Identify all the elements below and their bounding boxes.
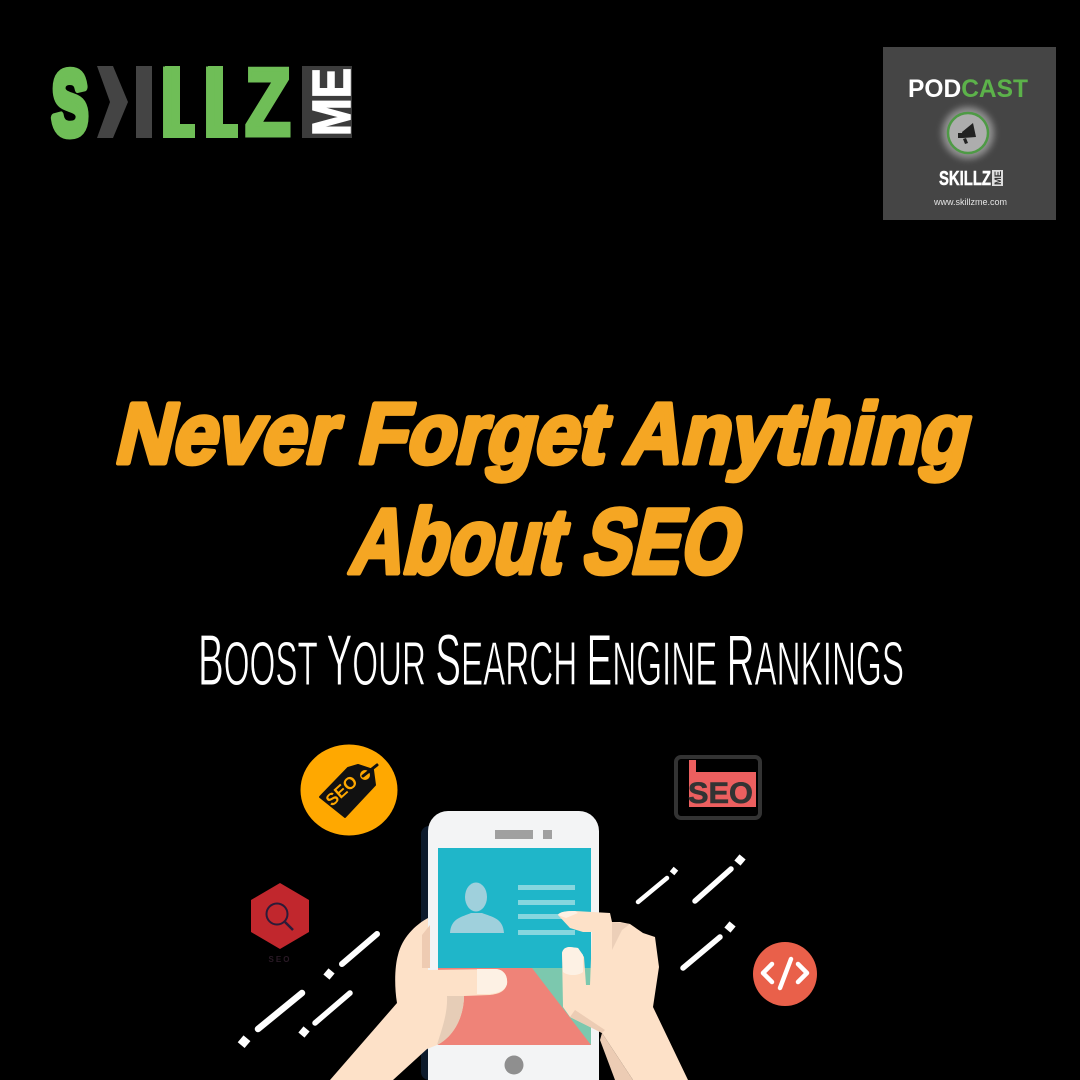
icon: code brackets [753, 942, 817, 1006]
left hand [330, 918, 507, 1080]
phone speaker [495, 830, 552, 839]
phone shadow [421, 826, 441, 1080]
phone home button [504, 1056, 524, 1074]
motion dashes [238, 854, 746, 1048]
icon: SEO search hexagon [251, 883, 309, 964]
profile text lines [518, 885, 575, 935]
icon: SEO search hexagon: SEO [269, 955, 291, 964]
podcast logo: ME [993, 171, 1003, 185]
panel: podcast badge [883, 47, 1056, 220]
phone screen [438, 848, 591, 1045]
podcast heading: PODCAST [908, 75, 1028, 103]
illustration: phone in hands [330, 811, 688, 1080]
title: About SEO [342, 490, 754, 593]
title: Never Forget Anything [109, 386, 983, 482]
logo: SkillzMe [52, 45, 362, 161]
icon: SEO price tag [300, 744, 398, 836]
logo: SkillzMe: ME [302, 68, 362, 136]
phone body [428, 811, 599, 1080]
title [109, 386, 983, 593]
podcast logo: SKILLZ [939, 168, 991, 190]
profile avatar [450, 882, 504, 933]
icon: SEO price tag: SEO [322, 772, 361, 810]
icon: SEO browser window: SEO [688, 777, 753, 810]
podcast url: www.skillzme.com [933, 197, 1007, 207]
logo: SkillzMe: L [159, 45, 196, 161]
logo: SkillzMe: Z [245, 49, 291, 156]
subtitle: BOOST YOUR SEARCH ENGINE RANKINGS [198, 621, 904, 701]
icon: megaphone [942, 107, 994, 159]
right hand [558, 911, 688, 1080]
logo: SkillzMe: S [52, 53, 88, 153]
logo: SkillzMe: L [202, 45, 239, 161]
icon: SEO browser window [676, 757, 760, 818]
